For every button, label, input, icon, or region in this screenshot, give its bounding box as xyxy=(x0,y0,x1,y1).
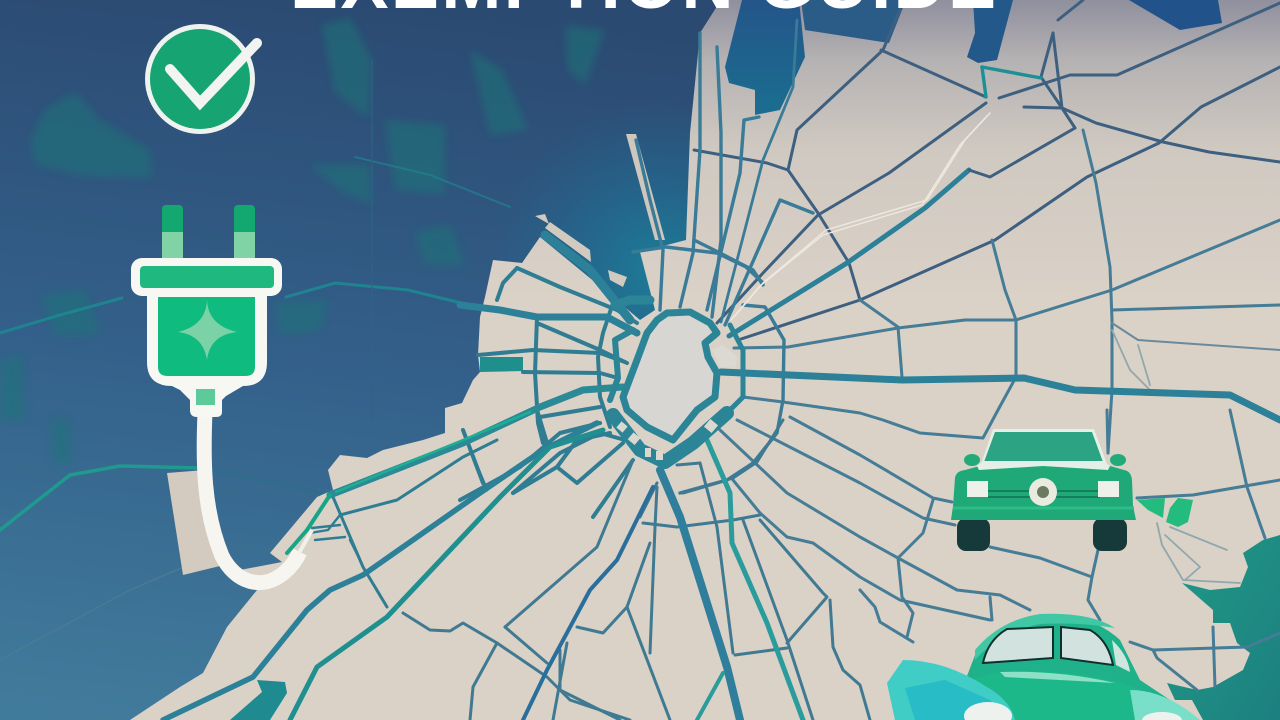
green splash xyxy=(1137,498,1193,527)
thick highways xyxy=(163,128,1280,720)
north bay xyxy=(801,0,906,43)
upper roads xyxy=(694,0,1280,340)
pale harbour streets xyxy=(1112,330,1240,583)
teal landmass shadows xyxy=(0,18,605,465)
check mark xyxy=(170,43,257,103)
left window xyxy=(983,627,1053,663)
right fender xyxy=(1130,690,1200,720)
roof and windshield xyxy=(981,429,1107,464)
rear side window xyxy=(1112,640,1130,672)
car body xyxy=(951,464,1136,520)
southwest bay xyxy=(230,680,287,720)
plug icon xyxy=(131,205,312,583)
central island xyxy=(623,312,717,440)
far northeast inlet xyxy=(1129,0,1222,30)
right headlight xyxy=(1142,712,1182,720)
west radial roads xyxy=(310,268,637,607)
blue southwest artery xyxy=(523,487,653,720)
hood highlight xyxy=(1000,672,1115,683)
western block xyxy=(480,357,523,372)
ring road light blocks xyxy=(616,419,718,460)
right prong xyxy=(234,205,255,235)
plug star xyxy=(178,298,237,360)
plug head xyxy=(131,258,282,296)
north radial roads xyxy=(633,20,1041,493)
bay: lower right xyxy=(1167,535,1280,720)
car roof xyxy=(950,615,1200,720)
left fender xyxy=(887,660,1015,720)
headlights xyxy=(967,481,988,497)
teal glow near coast xyxy=(400,60,800,460)
left prong xyxy=(162,205,183,235)
cable xyxy=(204,412,300,583)
hood xyxy=(930,671,1200,720)
railway double line xyxy=(731,113,990,320)
tyres xyxy=(957,518,990,551)
mirrors xyxy=(964,454,980,466)
south thin roads xyxy=(403,420,870,720)
coastal sliver xyxy=(626,134,665,240)
left headlight xyxy=(964,702,1012,720)
front view car xyxy=(951,429,1136,551)
island side block xyxy=(712,345,738,368)
plug neck xyxy=(196,389,215,405)
check badge xyxy=(145,24,257,134)
northeast inlet xyxy=(967,0,1013,63)
east roads xyxy=(720,130,1280,690)
emblem xyxy=(1029,478,1057,506)
inner ring mass xyxy=(610,300,743,462)
teal green highways xyxy=(287,387,803,720)
plug body xyxy=(147,292,267,417)
grille xyxy=(988,491,1100,497)
land patch xyxy=(167,470,220,575)
offshore channels xyxy=(0,60,510,660)
coastal slivers northwest xyxy=(535,214,627,287)
north inlet xyxy=(725,0,805,115)
right window xyxy=(1061,627,1113,665)
vintage car xyxy=(887,614,1200,720)
